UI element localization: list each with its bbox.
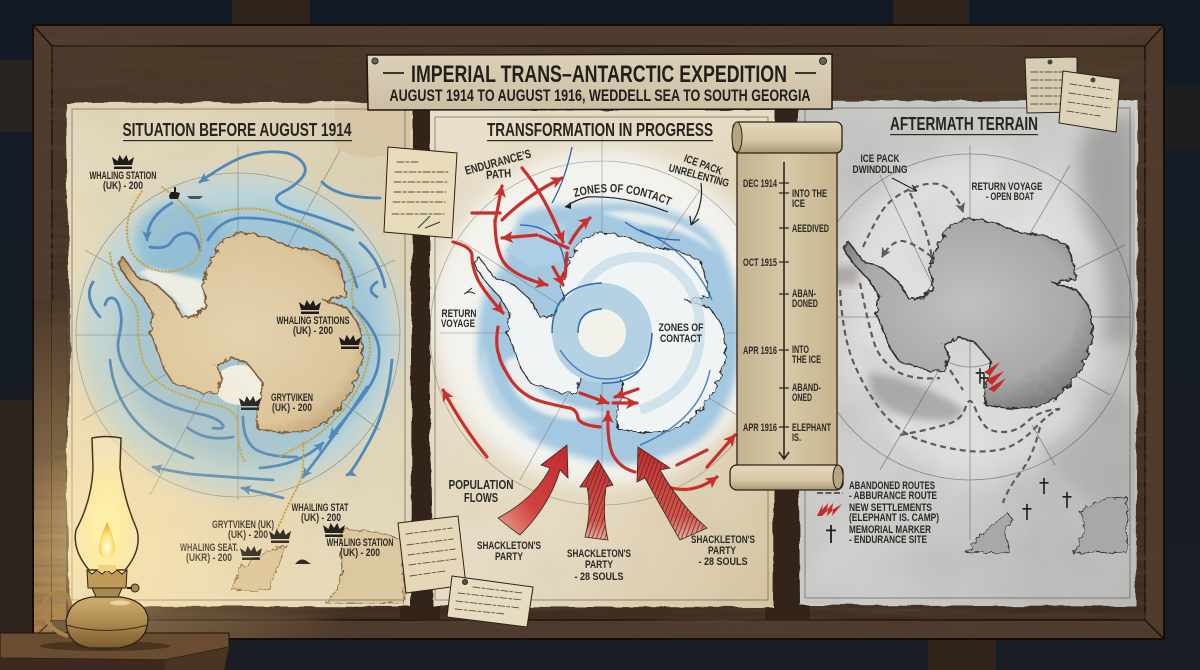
map labels: PATH [486,166,512,182]
legend: ABANDONED ROUTES [849,480,935,492]
timeline events: ABAND- [792,382,821,394]
timeline dates: APR 1916 [743,345,777,357]
map labels [441,147,755,583]
pinned note: bottom [447,576,533,627]
labels: whaling stations: WHAILING STAT [292,502,349,514]
labels: whaling stations: (UK) - 200 [340,547,380,559]
labels: whaling stations: (UK) - 200 [228,529,268,541]
map labels: aftermath: - OPEN BOAT [986,191,1034,203]
map labels: FLOWS [464,490,498,505]
map labels: VOYAGE [441,318,475,330]
pinned notes: top right [1025,57,1120,132]
oil lamp [44,436,148,648]
panel: aftermath terrain [798,100,1138,606]
lamp handle [44,592,71,636]
gold dotted route lines [110,187,370,530]
map labels: aftermath [852,153,1042,203]
timeline dates [743,178,778,434]
map labels: POPULATION [448,477,514,492]
map labels: SHACKLETON'S [691,534,755,546]
timeline axis [779,162,789,459]
map labels: aftermath: RETURN VOYAGE [972,181,1042,193]
timeline events: ONED [792,392,812,404]
labels: whaling stations [90,170,394,564]
map labels: PARTY [585,559,614,571]
map labels: - 28 SOULS [574,571,624,583]
map: ice rings and continent [430,135,736,540]
timeline dates: OCT 1915 [743,257,777,269]
timeline events: ELEPHANT [792,422,831,434]
map labels: ZONES OF [658,322,704,334]
glass chimney [75,436,138,570]
map labels: CONTACT [660,333,702,345]
heading: transformation: TRANSFORMATION IN PROGRESS [487,119,713,140]
labels: whaling stations: WHALING SEAT. [180,542,238,554]
map labels: ICE PACK [682,153,724,178]
map: grey washes and continent [800,102,1135,604]
legend: - ENDURANCE SITE [849,534,927,546]
title plaque [367,54,832,110]
flame [99,522,115,558]
crown icons and whaling ships [112,155,361,564]
legend: (ELEPHANT IS. CAMP) [849,512,939,524]
map labels: ZONES OF CONTACT [573,184,672,205]
labels: whaling stations: GRYTVIKEN (UK) [212,519,274,531]
timeline events: ABAN- [792,288,816,300]
map labels: PARTY [495,551,524,563]
map labels: ENDURANCE'S [463,147,533,178]
timeline events: IS. [792,432,801,444]
timeline events [792,188,831,444]
legend: - ABBURANCE ROUTE [849,490,937,502]
labels: whaling stations: (UK) - 200 [293,325,333,337]
labels: whaling stations: (UK) - 200 [103,180,143,192]
panel: situation before August 1914 [66,102,412,607]
timeline events: INTO THE [792,188,827,200]
labels: whaling stations: (UK) - 200 [301,512,341,524]
map labels: aftermath: ICE PACK [860,153,900,165]
labels: whaling stations: (UKR) - 200 [186,552,232,564]
labels: whaling stations: WHALING STATION [90,170,157,182]
lamp collar [92,588,122,597]
side table [0,633,229,670]
memorial crosses [976,368,1072,520]
timeline scroll [730,122,843,490]
panel: transformation in progress [429,110,775,608]
timeline events: THE ICE [792,354,821,366]
timeline events: AEEDIVED [792,223,829,235]
map labels: UNRELENTING [667,162,730,190]
labels: whaling stations: WHALING STATION [326,537,394,549]
heading: aftermath: AFTERMATH TERRAIN [890,113,1038,134]
timeline events: DONED [792,298,818,310]
labels: whaling stations: (UK) - 200 [272,402,312,414]
large red population flow arrows [498,445,707,540]
lamp base [66,597,148,648]
red new settlement marks [984,362,1006,392]
lamp light glow [34,290,400,638]
panel inner borders [72,108,1130,600]
legend [817,480,939,546]
timeline events: INTO [792,344,809,356]
map labels: PARTY [708,545,737,557]
timeline dates: DEC 1914 [743,178,778,190]
subtitle: AUGUST 1914 TO AUGUST 1916, WEDDELL SEA TO SOUTH GEORGIA [390,87,811,105]
heading: situation: SITUATION BEFORE AUGUST 1914 [122,119,352,140]
map labels: - 28 SOULS [698,556,748,568]
map labels: aftermath: DWINDDLING [852,164,908,176]
timeline events: ICE [792,198,805,210]
map labels: SHACKLETON'S [567,548,631,560]
pinned note: lower centre [398,516,466,593]
timeline dates: APR 1916 [743,422,777,434]
map: sea wash, graticule and continent [75,104,410,604]
labels: whaling stations: GRYTVIKEN [271,392,313,404]
title: IMPERIAL TRANS–ANTARCTIC EXPEDITION [411,61,787,88]
thin red route arrows [443,168,735,489]
dashed abandoned routes [840,184,1060,503]
blue ocean current arrows [89,152,392,498]
map labels: RETURN [442,308,477,320]
labels: whaling stations: WHALING STATIONS [276,315,350,327]
map labels: SHACKLETON'S [477,540,541,552]
legend: MEMORIAL MARKER [849,524,931,536]
legend: NEW SETTLEMENTS [849,502,932,514]
pinned note: upper centre [384,147,457,238]
